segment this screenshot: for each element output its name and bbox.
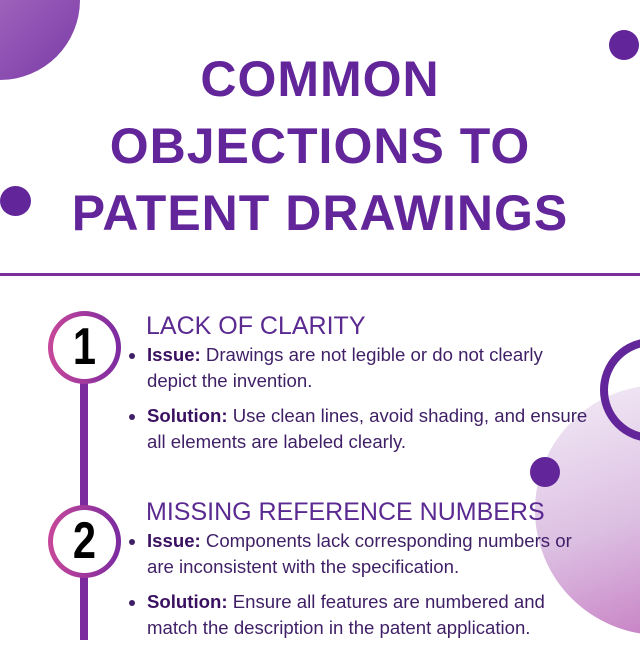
timeline line <box>80 380 88 640</box>
number badge 1: 1 <box>73 318 96 376</box>
big right circle <box>535 385 640 635</box>
decorative top-left circle <box>0 0 80 80</box>
dot left <box>0 186 31 216</box>
text 1: Solution: Use clean lines, avoid shading, and ensure all elements are labeled clearly. <box>147 405 587 452</box>
text 1 <box>129 344 587 452</box>
number badge 2: 2 <box>73 512 96 570</box>
title <box>72 51 568 241</box>
title: COMMON <box>200 51 440 107</box>
title: OBJECTIONS TO <box>110 118 530 174</box>
text 2 <box>129 530 572 638</box>
text 1: Issue: Drawings are not legible or do not clearly depict the invention. <box>147 344 543 391</box>
heading 2: MISSING REFERENCE NUMBERS <box>146 498 545 526</box>
number badge 2 <box>48 505 121 578</box>
text 2: Solution: Ensure all features are numbered and match the description in the patent application. <box>147 591 545 638</box>
dot top right <box>609 30 639 60</box>
number badge 1 <box>48 311 121 384</box>
text 2: Issue: Components lack corresponding numbers or are inconsistent with the specification. <box>147 530 572 577</box>
title: PATENT DRAWINGS <box>72 185 568 241</box>
right ring <box>600 338 640 442</box>
dot right middle <box>530 457 560 487</box>
heading 1: LACK OF CLARITY <box>146 312 366 340</box>
